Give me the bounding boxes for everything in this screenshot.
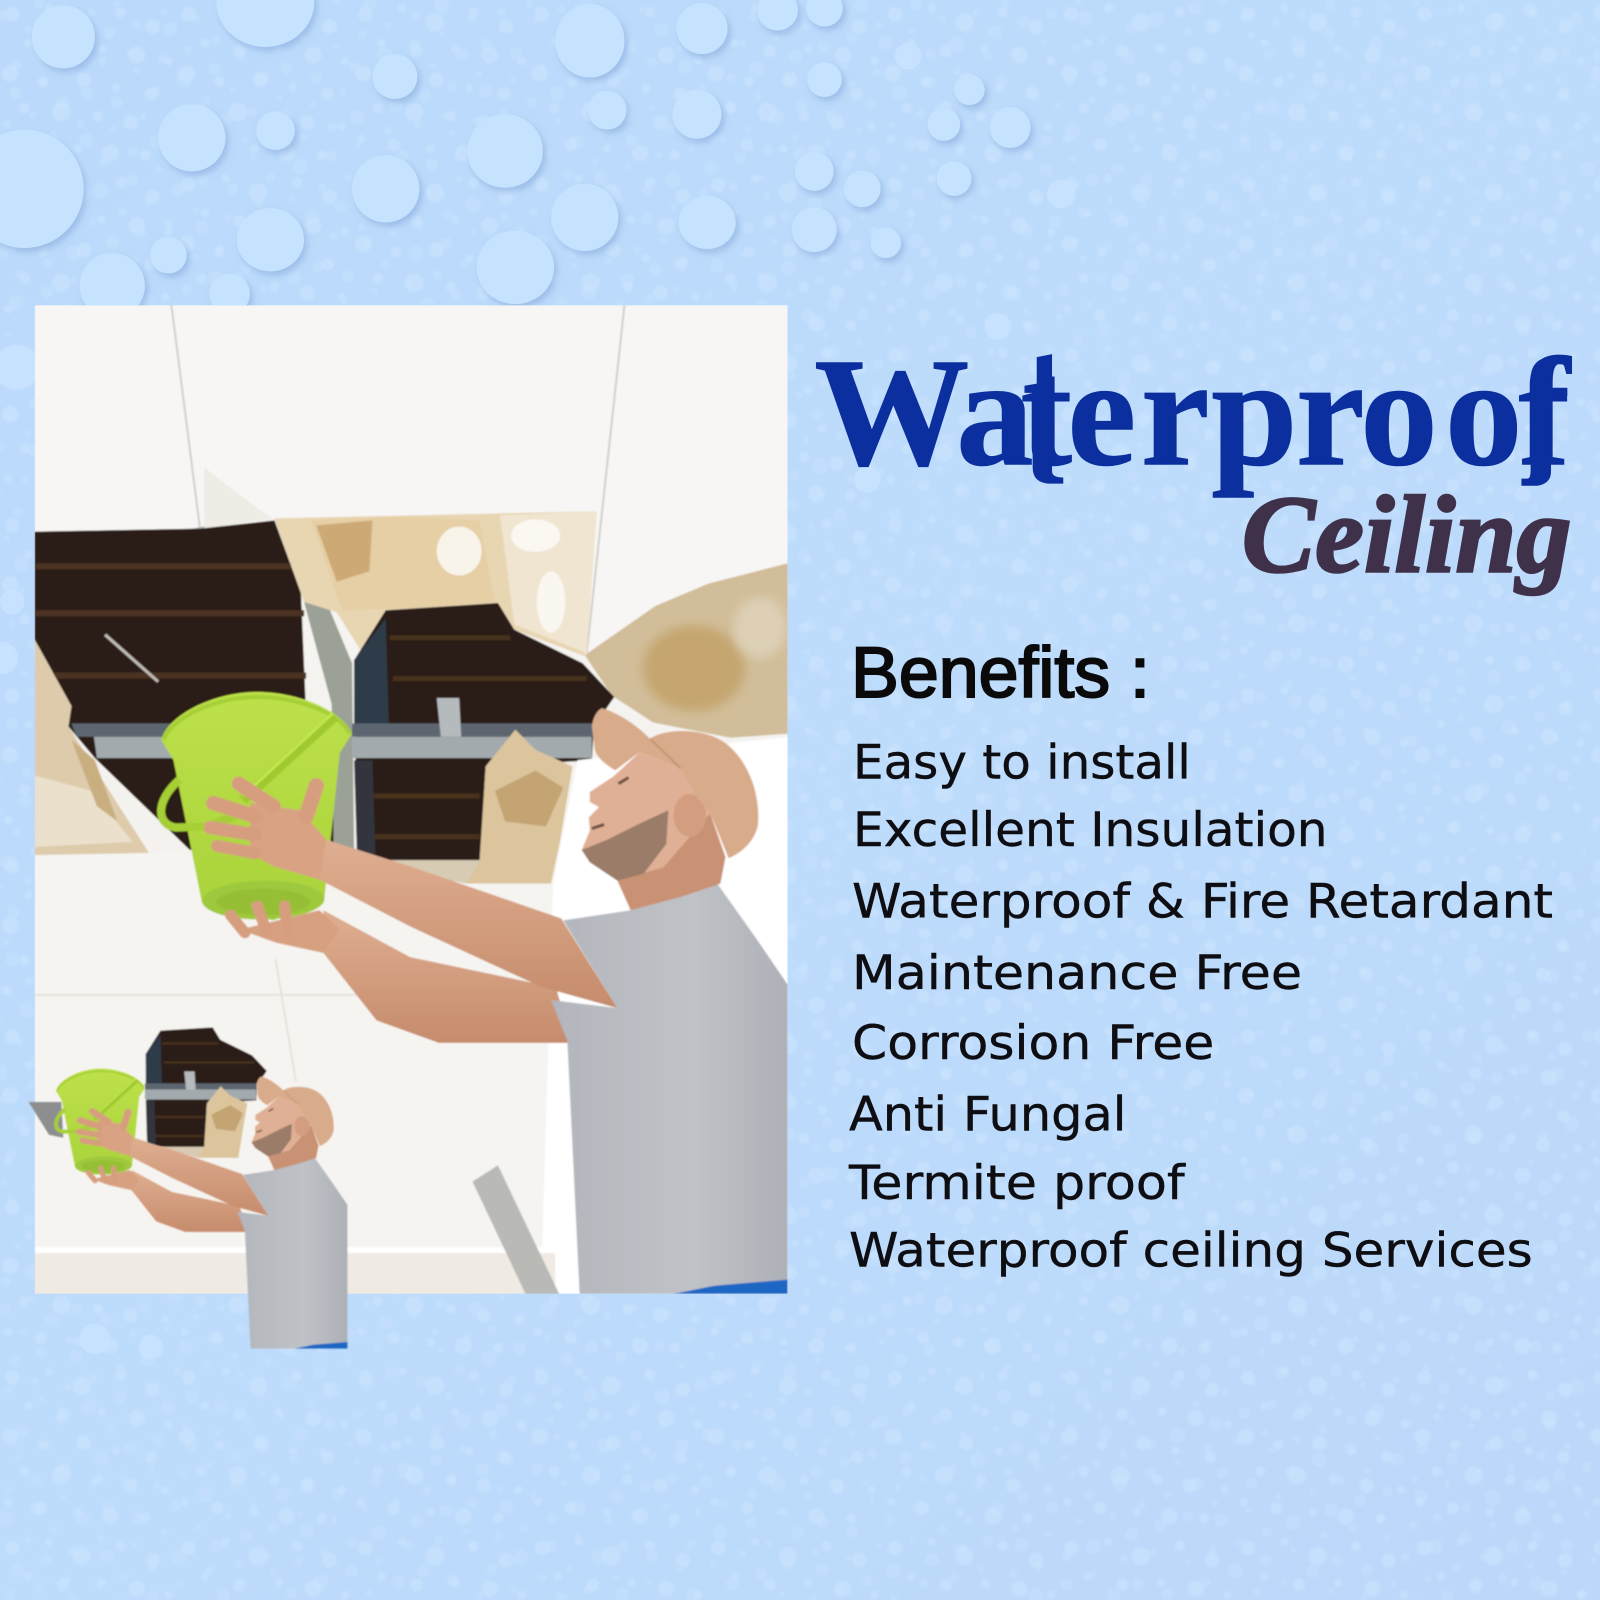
benefit 6: Anti Fungal [849, 1088, 1127, 1143]
large worker with bucket [161, 692, 788, 1294]
ceiling panels [34, 305, 788, 854]
photo panel: man catching leak under damaged ceiling [29, 305, 788, 1349]
benefits list [848, 736, 1553, 1278]
benefit 3: Waterproof & Fire Retardant [852, 874, 1553, 929]
lower white ceiling [35, 737, 788, 1294]
benefit 1: Easy to install [853, 736, 1191, 791]
benefit 5: Corrosion Free [852, 1016, 1214, 1071]
heading: Benefits: Benefits : [851, 633, 1150, 713]
benefit 8: Waterproof ceiling Services [849, 1223, 1533, 1278]
torn plaster and water stains [35, 511, 788, 855]
benefit 7: Termite proof [848, 1156, 1186, 1211]
ladder [472, 1165, 559, 1294]
small worker with bucket [29, 1069, 347, 1349]
benefit 4: Maintenance Free [852, 946, 1302, 1001]
subtitle: Ceiling: Ceiling [1242, 473, 1571, 595]
second ceiling hole [352, 603, 614, 884]
title: Waterproof: Waterproof [814, 326, 1572, 498]
benefit 2: Excellent Insulation [853, 803, 1328, 858]
ceiling hole: left [35, 520, 354, 852]
small ceiling hole copy [145, 1027, 267, 1158]
